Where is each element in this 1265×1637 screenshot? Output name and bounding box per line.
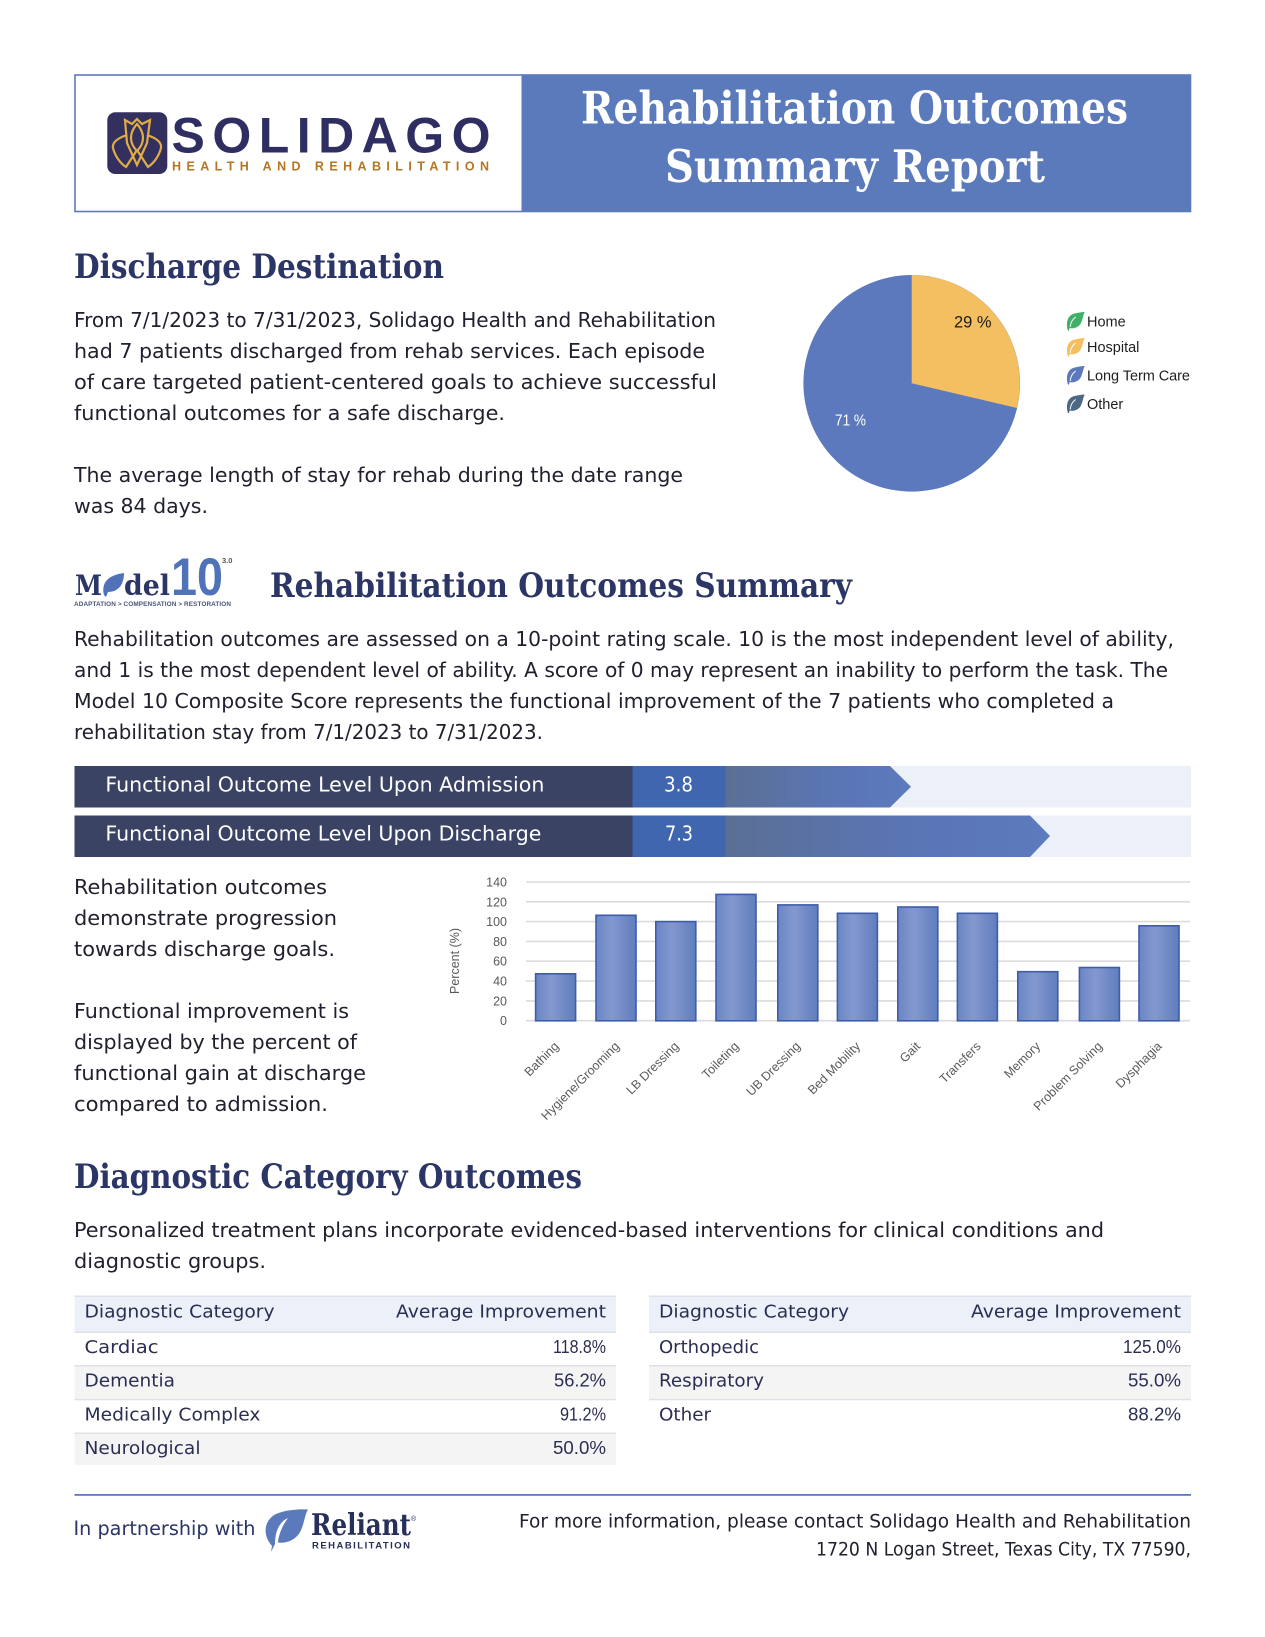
x axis labels: Bed Mobility — [805, 1039, 864, 1097]
text block: progression notes: demonstrate progression — [74, 906, 337, 930]
legend item: Hospital: Hospital — [1087, 340, 1139, 356]
table: diagnostic categories left: Diagnostic Category — [84, 1302, 275, 1323]
text block: discharge summary: From 7/1/2023 to 7/31/2023, Solidago Health and Rehabilitation — [74, 308, 716, 332]
logo tagline: HEALTH AND REHABILITATION — [172, 160, 489, 174]
table: diagnostic categories left — [74, 1296, 616, 1465]
x axis labels: LB Dressing — [624, 1039, 682, 1097]
text block: outcomes explanation: rehabilitation stay from 7/1/2023 to 7/31/2023. — [74, 720, 543, 744]
legend item: Long Term Care: Long Term Care — [1087, 369, 1190, 385]
y axis labels: 80 — [493, 935, 507, 949]
table: diagnostic categories left: Dementia — [84, 1371, 175, 1392]
logo: Model 10: del — [124, 569, 170, 602]
table: diagnostic categories left: Medically Complex — [84, 1405, 261, 1426]
text block: discharge summary — [73, 308, 717, 518]
icon: Reliant leaf — [266, 1509, 308, 1552]
report title: Summary Report — [665, 140, 1045, 193]
x axis labels — [522, 1039, 1165, 1123]
logo: Solidago — [107, 108, 491, 174]
table: diagnostic categories right: 125.0% — [1123, 1336, 1181, 1357]
table: diagnostic categories right: 55.0% — [1128, 1370, 1181, 1391]
y axis labels: 120 — [486, 895, 507, 909]
bar: functional outcome upon discharge: 7.3 — [665, 822, 693, 846]
y axis labels: 40 — [493, 974, 507, 988]
text block: discharge summary: was 84 days. — [74, 494, 208, 518]
pie chart: discharge destination: 29 % — [954, 314, 992, 332]
text block: progression notes: functional gain at discharge — [74, 1061, 366, 1085]
text block: discharge summary: functional outcomes for a safe discharge. — [74, 401, 505, 425]
bar: functional outcome upon admission — [74, 766, 1191, 808]
text block: progression notes: towards discharge goals. — [74, 937, 335, 961]
table: diagnostic categories left: 118.8% — [553, 1336, 606, 1357]
x axis labels: Bathing — [522, 1039, 562, 1079]
y axis labels: 20 — [493, 994, 507, 1008]
logo: Model 10: 3.0 — [222, 556, 232, 565]
footer: partnership: Reliant — [311, 1508, 411, 1543]
x axis labels: Toileting — [699, 1039, 742, 1082]
bar chart: functional gain by task — [448, 876, 1190, 1123]
logo: Model 10: M — [75, 569, 102, 602]
text block: progression notes: compared to admission. — [74, 1092, 328, 1116]
table: diagnostic categories left: 56.2% — [554, 1370, 606, 1391]
x axis labels: Memory — [1001, 1039, 1044, 1081]
table: diagnostic categories right: Respiratory — [659, 1371, 764, 1392]
y axis title: Percent (%) — [448, 928, 462, 994]
text block: discharge summary: had 7 patients discharged from rehab services. Each episode — [74, 339, 705, 363]
table: diagnostic categories right: Orthopedic — [659, 1337, 759, 1358]
pie chart: discharge destination: 71 % — [835, 413, 866, 430]
logo: Model 10: 10 — [171, 548, 223, 607]
bar: functional outcome upon discharge — [74, 816, 1191, 857]
x axis labels: Hygiene/Grooming — [539, 1039, 622, 1123]
x axis labels: Gait — [897, 1039, 923, 1065]
pie chart: discharge destination — [803, 275, 1020, 492]
text block: outcomes explanation: Model 10 Composite Score represents the functional improvement of the 7 patients who completed a — [74, 689, 1114, 713]
bars — [536, 894, 1179, 1021]
text block: treatment plans — [74, 1218, 1104, 1273]
y axis labels: 0 — [500, 1014, 507, 1028]
text block: discharge summary: The average length of stay for rehab during the date range — [73, 463, 683, 487]
x axis labels: UB Dressing — [744, 1039, 803, 1099]
text block: treatment plans: Personalized treatment plans incorporate evidenced-based interventions for clinical conditions and — [74, 1218, 1104, 1242]
logo wordmark: SOLIDAGO — [172, 108, 490, 164]
text block: progression notes — [74, 875, 366, 1116]
table: diagnostic categories left: Cardiac — [84, 1337, 158, 1358]
text block: treatment plans: diagnostic groups. — [74, 1249, 266, 1273]
table: diagnostic categories left: Average Improvement — [396, 1302, 606, 1323]
text block: outcomes explanation: and 1 is the most dependent level of ability. A score of 0 may represent an inability to perform the task. The — [74, 658, 1168, 682]
heading: Discharge Destination: Discharge Destination — [74, 247, 444, 286]
heading: Rehabilitation Outcomes Summary: Rehabilitation Outcomes Summary — [270, 566, 853, 605]
footer: partnership: In partnership with — [74, 1517, 256, 1540]
y axis labels: 100 — [486, 915, 507, 929]
footer: contact information — [519, 1510, 1191, 1560]
y axis labels: 140 — [486, 876, 507, 890]
x axis labels: Dysphagia — [1113, 1039, 1165, 1091]
logo: Model 10 — [74, 548, 232, 608]
x axis labels: Transfers — [937, 1039, 984, 1086]
text block: progression notes: Rehabilitation outcomes — [74, 875, 327, 899]
table: diagnostic categories right: Diagnostic Category — [659, 1302, 849, 1323]
pie legend — [1067, 312, 1190, 414]
text block: outcomes explanation: Rehabilitation outcomes are assessed on a 10-point rating scale. 10 is the most independent level of ability, — [74, 627, 1174, 651]
bar: functional outcome upon admission: 3.8 — [664, 772, 693, 796]
legend item: Home: Home — [1087, 315, 1126, 331]
x axis labels: Problem Solving — [1031, 1039, 1105, 1113]
table: diagnostic categories right — [649, 1296, 1191, 1426]
text block: progression notes: displayed by the percent of — [74, 1030, 358, 1054]
text block: discharge summary: of care targeted patient-centered goals to achieve successful — [74, 370, 717, 394]
logo icon — [107, 112, 167, 174]
heading: Diagnostic Category Outcomes: Diagnostic Category Outcomes — [74, 1157, 582, 1196]
footer: partnership — [74, 1508, 417, 1552]
footer: contact information: For more information, please contact Solidago Health and Rehabilitation — [519, 1510, 1191, 1532]
logo: Model 10: ADAPTATION > COMPENSATION > RESTORATION — [74, 601, 231, 608]
table: diagnostic categories left: 91.2% — [560, 1404, 606, 1425]
footer: contact information: 1720 N Logan Street, Texas City, TX 77590, — [816, 1538, 1191, 1560]
report title — [581, 82, 1128, 193]
text block: outcomes explanation — [74, 627, 1174, 744]
table: diagnostic categories right: Other — [659, 1405, 712, 1426]
report title: Rehabilitation Outcomes — [581, 82, 1128, 134]
table: diagnostic categories left: 50.0% — [553, 1437, 606, 1458]
table: diagnostic categories right: Average Improvement — [971, 1302, 1181, 1323]
bar: functional outcome upon admission: Functional Outcome Level Upon Admission — [105, 772, 544, 796]
bar: functional outcome upon discharge: Functional Outcome Level Upon Discharge — [105, 822, 541, 846]
footer: partnership: REHABILITATION — [312, 1540, 410, 1552]
legend item: Other: Other — [1087, 397, 1123, 413]
table: diagnostic categories right: 88.2% — [1128, 1404, 1181, 1425]
y axis labels — [486, 876, 507, 1028]
table: diagnostic categories left: Neurological — [84, 1438, 200, 1459]
footer: partnership: ® — [411, 1515, 417, 1523]
text block: progression notes: Functional improvement is — [74, 999, 349, 1023]
header banner — [75, 74, 1191, 212]
y axis labels: 60 — [493, 955, 507, 969]
